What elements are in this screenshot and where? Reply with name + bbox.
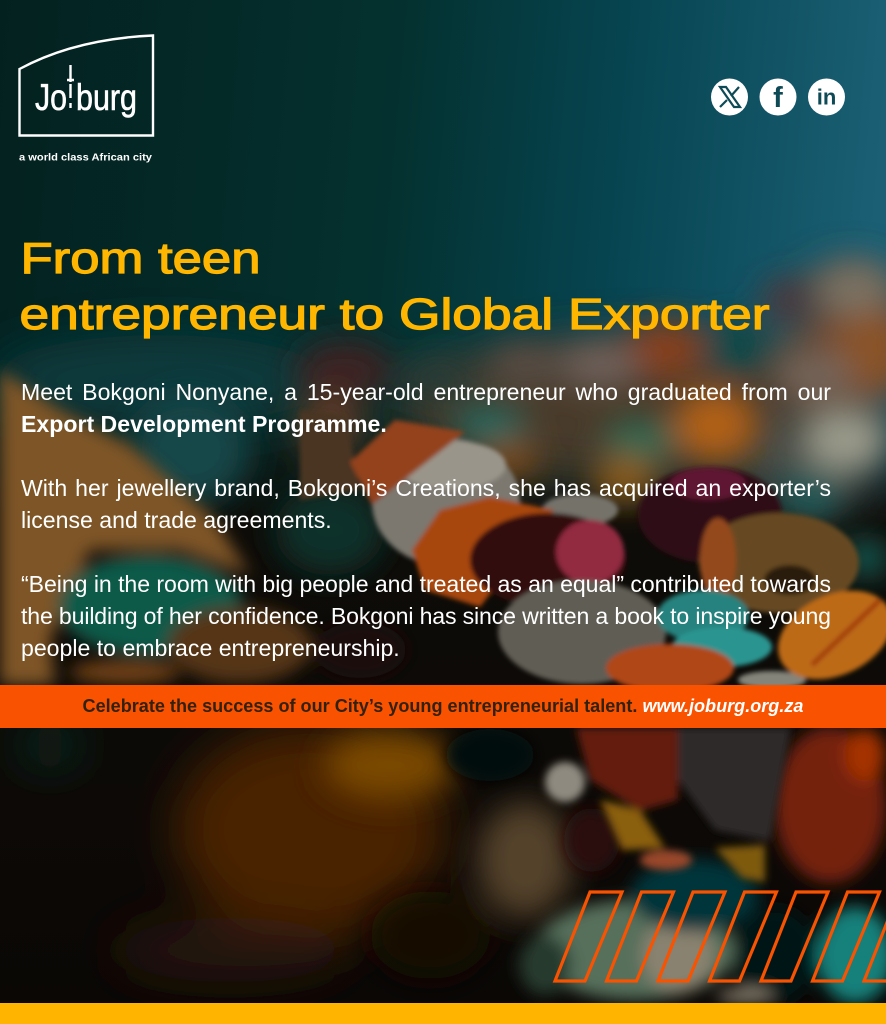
title: entrepreneur to Global Exporter — [20, 290, 769, 339]
body text: Export Development Programme. — [21, 411, 387, 437]
yellow footer bar — [0, 1003, 886, 1024]
social icons — [711, 78, 845, 116]
icon: LinkedIn: in — [817, 84, 836, 110]
body text: license and trade agreements. — [21, 507, 332, 533]
logo wordmark left: Jo — [35, 77, 67, 118]
icon: Facebook: f — [773, 82, 783, 114]
logo: Joburg — [18, 34, 154, 164]
icon: X — [711, 78, 748, 116]
logo wordmark right: burg — [76, 77, 137, 118]
body text — [21, 379, 831, 661]
decorative stripes — [552, 890, 886, 983]
logo tagline: a world class African city — [19, 152, 152, 164]
foreground beads, upper — [300, 410, 886, 697]
body text: the building of her confidence. Bokgoni has since written a book to inspire young — [21, 603, 831, 629]
title: From teen — [20, 234, 260, 283]
logo frame — [20, 36, 153, 136]
body text: “Being in the room with big people and treated as an equal” contributed towards — [21, 571, 831, 597]
body text: people to embrace entrepreneurship. — [21, 635, 400, 661]
bottom left beads — [20, 725, 445, 982]
body text: Meet Bokgoni Nonyane, a 15-year-old entrepreneur who graduated from our — [21, 379, 831, 405]
orange banner — [0, 685, 886, 728]
body text: With her jewellery brand, Bokgoni’s Creations, she has acquired an exporter’s — [21, 475, 831, 501]
title — [20, 234, 770, 339]
orange banner: Celebrate the success of our City’s young entrepreneurial talent. www.joburg.org.za — [83, 696, 803, 716]
far layer — [0, 270, 886, 510]
logo tower — [67, 65, 74, 108]
spindle, lower — [545, 728, 791, 882]
